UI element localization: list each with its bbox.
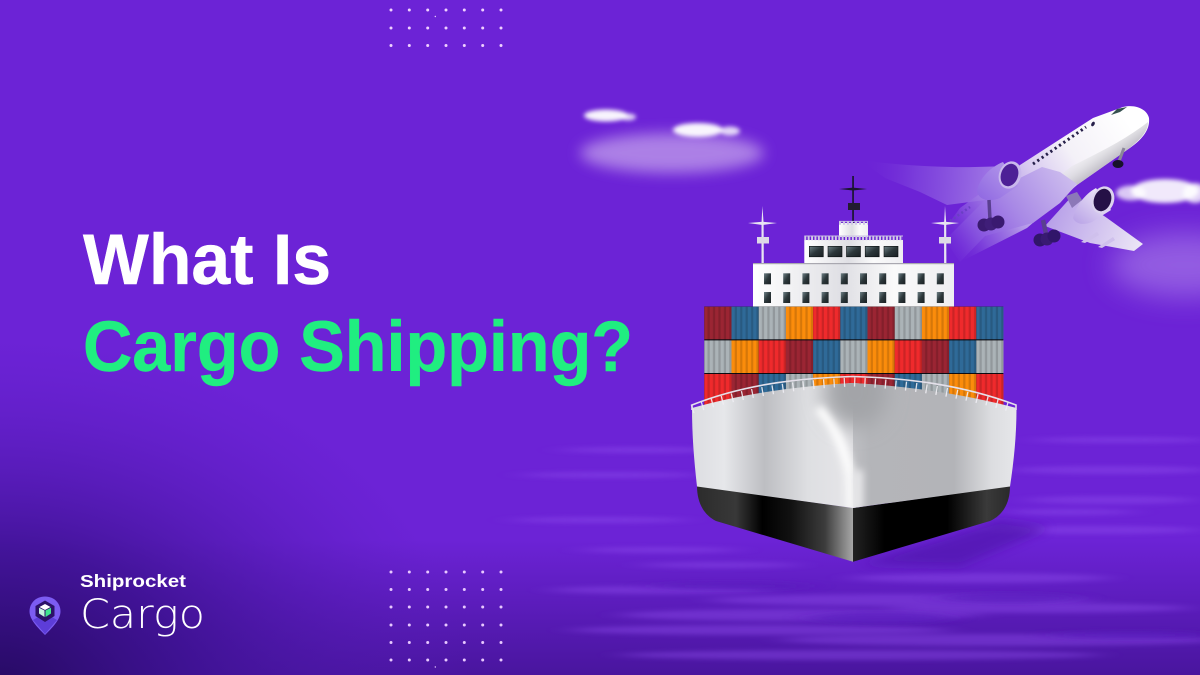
left main gear: [978, 200, 1004, 232]
title: [83, 221, 633, 387]
cabin windows: [764, 273, 944, 303]
container row 3: [704, 374, 1004, 408]
bridge top block: [839, 222, 868, 237]
hull upper white: [692, 383, 1016, 508]
bow shading: [814, 383, 890, 437]
far wing: [860, 160, 1002, 205]
near wing: [1045, 195, 1143, 251]
decorative dot grid: bottom: [390, 570, 502, 668]
brand name: Shiprocket: Shiprocket: [80, 571, 186, 591]
container ship: [690, 176, 1018, 562]
clouds: [580, 110, 1200, 297]
left side mast: [748, 206, 777, 263]
right main gear: [1034, 220, 1060, 246]
main mast: [839, 176, 867, 224]
rear windows: [950, 207, 970, 221]
cockpit window: [1111, 107, 1127, 115]
accommodation block: [753, 263, 954, 307]
title line: Cargo Shipping?: Cargo Shipping?: [83, 308, 633, 387]
fuselage underside shading: [1060, 122, 1148, 185]
icon: location pin with cube: [30, 596, 60, 635]
right engine: [1073, 183, 1118, 224]
door window: [1090, 121, 1096, 127]
hull shadow on water: [860, 520, 1050, 566]
hull waterline band: [697, 486, 1010, 562]
title line: What Is: What Is: [83, 221, 331, 300]
flap fairings: [1081, 232, 1115, 248]
left engine: [977, 158, 1025, 200]
fuselage: [940, 106, 1149, 262]
container row 2: [704, 340, 1004, 373]
right side mast: [931, 206, 959, 263]
sea surface streaks: [510, 437, 1200, 660]
lower bow glow: [853, 470, 863, 510]
brand logo: [30, 571, 205, 638]
container row 1: [704, 307, 1004, 339]
bridge deck: [804, 236, 903, 264]
decorative dot grid: top: [390, 8, 502, 47]
brand name: Cargo: Cargo: [80, 592, 205, 638]
wing root fairing: [945, 167, 1077, 262]
deck railing: [692, 376, 1016, 410]
engine pylon: [1066, 192, 1082, 208]
airplane: [860, 106, 1149, 262]
container stacks: [704, 306, 1004, 408]
bow highlight: [818, 408, 851, 512]
bridge windows: [809, 246, 898, 257]
passenger windows: [1033, 127, 1086, 164]
nose gear: [1112, 148, 1124, 168]
